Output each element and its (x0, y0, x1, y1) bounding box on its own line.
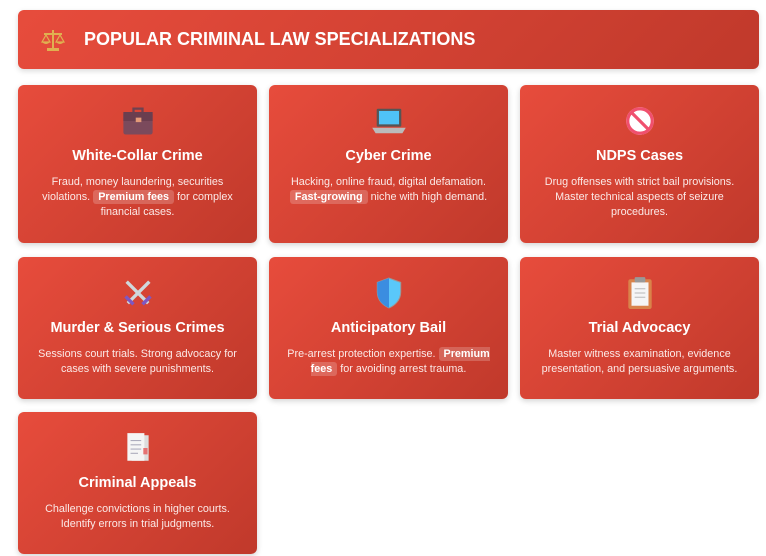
card: cyber: Hacking, online fraud, digital defamation. Fast-growing niche with high demand. (291, 176, 487, 203)
card: anticipatory bail: Pre-arrest protection expertise. Premium fees for avoiding arrest trauma. (287, 348, 490, 375)
card: trial advocacy (520, 257, 759, 399)
card: murder: Murder & Serious Crimes (50, 320, 225, 336)
card: NDPS: Drug offenses with strict bail provisions. Master technical aspects of seizure procedures. (545, 176, 734, 218)
card: murder (18, 257, 257, 399)
card: white-collar: White-Collar Crime (72, 148, 203, 164)
card: anticipatory bail: Anticipatory Bail (331, 320, 446, 336)
icon: shield (376, 278, 402, 308)
icon: clipboard (628, 277, 652, 309)
card: cyber (269, 85, 508, 243)
title (18, 10, 759, 69)
card: white-collar (18, 85, 257, 243)
card: appeals: Criminal Appeals (79, 475, 196, 491)
card: appeals: Challenge convictions in higher courts. Identify errors in trial judgments. (45, 503, 230, 530)
card: NDPS: NDPS Cases (596, 148, 683, 164)
card: cyber: Cyber Crime (345, 148, 432, 164)
icon: briefcase (123, 108, 153, 134)
card: anticipatory bail (269, 257, 508, 399)
card: white-collar: Fraud, money laundering, securities violations. Premium fees for complex financial cases. (42, 176, 233, 218)
icon: laptop (372, 108, 406, 134)
card: appeals (18, 412, 257, 554)
icon: crossed swords (124, 280, 152, 306)
icon: prohibited (626, 107, 654, 135)
card: trial advocacy: Master witness examination, evidence presentation, and persuasive arguments. (542, 348, 737, 375)
card: trial advocacy: Trial Advocacy (589, 320, 690, 336)
icon: document (127, 433, 149, 461)
card: NDPS (520, 85, 759, 243)
title: POPULAR CRIMINAL LAW SPECIALIZATIONS (84, 29, 475, 49)
card: murder: Sessions court trials. Strong advocacy for cases with severe punishments. (38, 348, 237, 375)
